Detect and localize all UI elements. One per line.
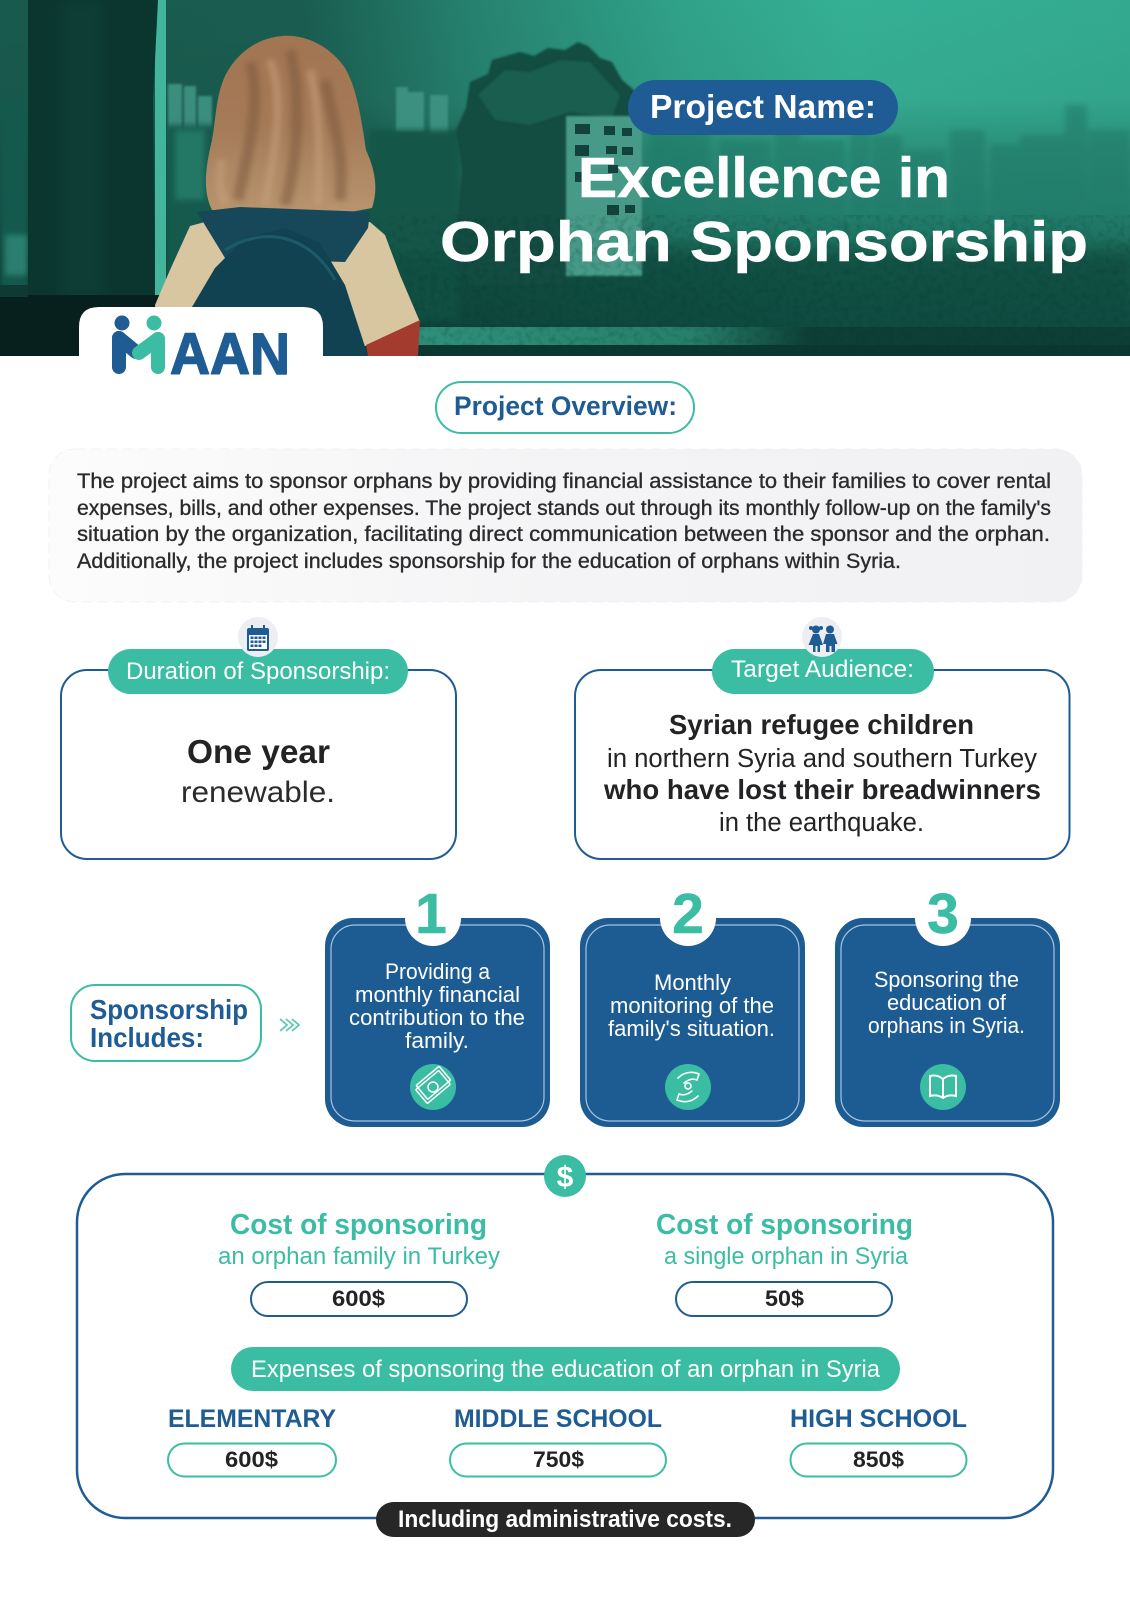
hood	[197, 207, 370, 262]
project overview panel	[49, 449, 1082, 602]
number 2: 2	[672, 882, 704, 946]
audience text: in northern Syria and southern Turkey	[607, 745, 1037, 773]
cost: single orphan in Syria: a single orphan in Syria	[664, 1243, 909, 1270]
card 1: financial contribution	[325, 882, 550, 1127]
overview paragraph: expenses, bills, and other expenses. The project stands out through its monthly follow-up on the family's	[77, 497, 1051, 520]
education expenses banner: Expenses of sponsoring the education of an orphan in Syria	[251, 1356, 881, 1383]
card text: family.	[405, 1028, 469, 1053]
card text	[868, 967, 1025, 1038]
icon: dollar: $	[557, 1161, 574, 1194]
arrow: chevrons	[280, 1019, 299, 1031]
window pillar	[0, 0, 166, 356]
audience text: who have lost their breadwinners	[603, 774, 1041, 805]
overview paragraph: situation by the organization, facilitating direct communication between the sponsor and the orphan.	[77, 523, 1050, 546]
duration text: One year	[187, 733, 330, 770]
sponsorship includes label: Sponsorship	[90, 994, 248, 1025]
hero banner	[0, 0, 1130, 356]
card 2: monthly monitoring	[580, 882, 805, 1127]
audience text: Syrian refugee children	[669, 709, 974, 740]
project name pill	[628, 80, 898, 135]
cost: family in Turkey: Cost of sponsoring	[230, 1209, 487, 1241]
card text: monthly financial	[355, 982, 520, 1007]
card text: orphans in Syria.	[868, 1013, 1025, 1038]
icon: dollar	[544, 1155, 586, 1197]
cost: high school	[790, 1405, 967, 1476]
cost: middle school	[450, 1405, 666, 1476]
project overview heading	[436, 382, 694, 433]
project name pill: Project Name:	[650, 88, 876, 125]
cost: elementary: 600$	[225, 1447, 278, 1472]
administrative costs note: Including administrative costs.	[398, 1506, 732, 1533]
sponsorship includes label	[71, 985, 261, 1061]
icon: calendar	[238, 617, 278, 657]
card text: contribution to the	[349, 1005, 525, 1030]
card 3: education	[835, 882, 1060, 1127]
overview paragraph: Additionally, the project includes sponsorship for the education of orphans within Syria.	[77, 550, 901, 573]
icon: money	[410, 1064, 456, 1110]
card text: Monthly	[654, 970, 731, 995]
audience heading pill: Target Audience:	[731, 656, 914, 683]
panel: duration of sponsorship	[61, 617, 456, 859]
cost: family in Turkey: an orphan family in Turkey	[218, 1243, 500, 1270]
audience heading pill	[712, 649, 934, 694]
shirt	[155, 222, 420, 356]
logo mark	[114, 316, 162, 367]
card text: Sponsoring the	[874, 967, 1019, 992]
cost: elementary	[168, 1405, 336, 1476]
cost: single orphan in Syria	[656, 1209, 913, 1316]
cost: family in Turkey: 600$	[332, 1286, 385, 1311]
panel: target audience	[575, 617, 1070, 859]
ruined building	[452, 42, 642, 285]
main title	[440, 146, 1088, 274]
logo wordmark: AAN	[170, 322, 290, 387]
icon: children	[802, 617, 842, 657]
sponsorship includes label: Includes:	[90, 1022, 204, 1053]
cost: high school: HIGH SCHOOL	[790, 1405, 967, 1433]
icon: caring hands	[665, 1064, 711, 1110]
card text: family's situation.	[608, 1016, 775, 1041]
card text: education of	[887, 990, 1007, 1015]
main title: Orphan Sponsorship	[440, 210, 1088, 274]
duration heading pill	[108, 649, 408, 694]
backpack	[192, 228, 368, 356]
cost: high school: 850$	[853, 1447, 904, 1472]
cost: elementary: ELEMENTARY	[168, 1405, 336, 1433]
card text: Providing a	[385, 959, 491, 984]
audience text	[603, 709, 1041, 837]
cost: middle school: MIDDLE SCHOOL	[454, 1405, 662, 1433]
red sleeve	[366, 320, 420, 356]
cost: single orphan in Syria: 50$	[765, 1286, 804, 1311]
cost: single orphan in Syria: Cost of sponsoring	[656, 1209, 913, 1241]
audience text: in the earthquake.	[719, 809, 924, 837]
cost: middle school: 750$	[533, 1447, 584, 1472]
card text	[608, 970, 775, 1041]
ground ledge	[380, 327, 810, 345]
number 1: 1	[415, 882, 447, 946]
overview paragraph: The project aims to sponsor orphans by providing financial assistance to their families to cover rental	[77, 470, 1051, 493]
child from behind	[155, 36, 420, 356]
hair	[206, 36, 375, 214]
education expenses banner	[231, 1347, 900, 1391]
duration heading pill: Duration of Sponsorship:	[126, 658, 390, 685]
project overview heading: Project Overview:	[454, 391, 677, 421]
rubble foreground texture	[370, 255, 1130, 330]
card text	[349, 959, 525, 1053]
cost: family in Turkey	[218, 1209, 500, 1316]
overview paragraph	[77, 470, 1051, 573]
number 3: 3	[927, 882, 959, 946]
panel: costs	[77, 1155, 1053, 1537]
duration text	[181, 733, 335, 809]
duration text: renewable.	[181, 776, 335, 809]
distant skyline	[0, 84, 1130, 320]
main title: Excellence in	[578, 146, 950, 210]
icon: open book	[920, 1064, 966, 1110]
logo tab	[79, 307, 323, 394]
card text: monitoring of the	[610, 993, 774, 1018]
